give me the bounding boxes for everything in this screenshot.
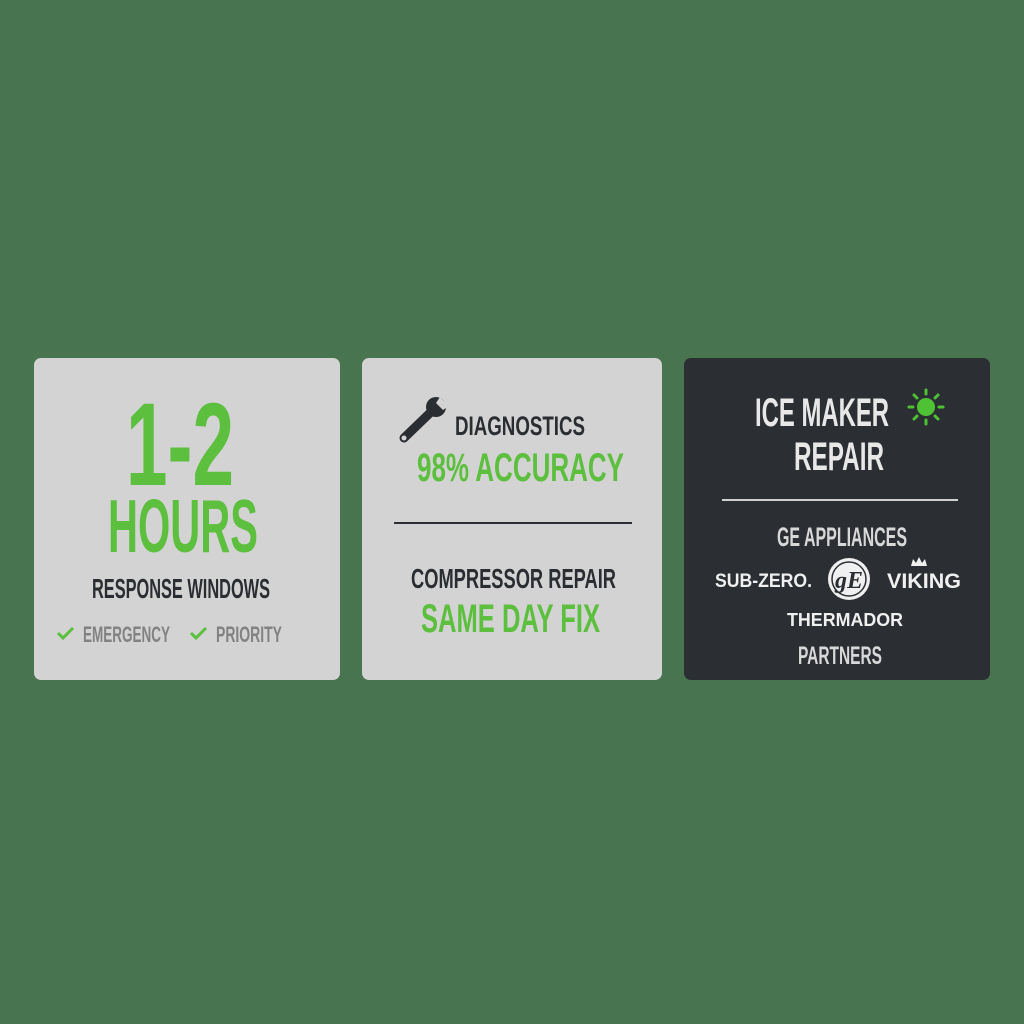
brand logos: gE [834, 568, 863, 594]
brand logos: THERMADOR [787, 610, 903, 630]
label: compressor repair: COMPRESSOR REPAIR [411, 563, 616, 594]
panel: diagnostics [362, 358, 662, 680]
brand logos: VIKING [887, 570, 961, 593]
headline: hours: HOURS [108, 484, 258, 568]
panel: ice maker repair: REPAIR [794, 435, 884, 479]
panel: ice maker repair [684, 358, 990, 680]
brand logos: SUB-ZERO. [715, 571, 812, 592]
stat: same day fix: SAME DAY FIX [421, 597, 600, 641]
label: diagnostics: DIAGNOSTICS [455, 411, 585, 441]
label: ge appliances: GE APPLIANCES [777, 522, 907, 552]
icon: wrench [402, 397, 449, 440]
subtitle: response windows: RESPONSE WINDOWS [92, 573, 270, 604]
panel: response time [34, 358, 340, 680]
stat: 98% accuracy: 98% ACCURACY [417, 446, 624, 490]
checklist [58, 622, 282, 647]
checklist: PRIORITY [216, 622, 282, 647]
label: partners: PARTNERS [798, 642, 882, 670]
brand logos [715, 557, 961, 630]
heading: ice maker repair: ICE MAKER [755, 391, 889, 435]
headline: 1-2: 1-2 [126, 379, 234, 511]
checklist: EMERGENCY [83, 622, 170, 647]
icon: sun [909, 390, 943, 424]
